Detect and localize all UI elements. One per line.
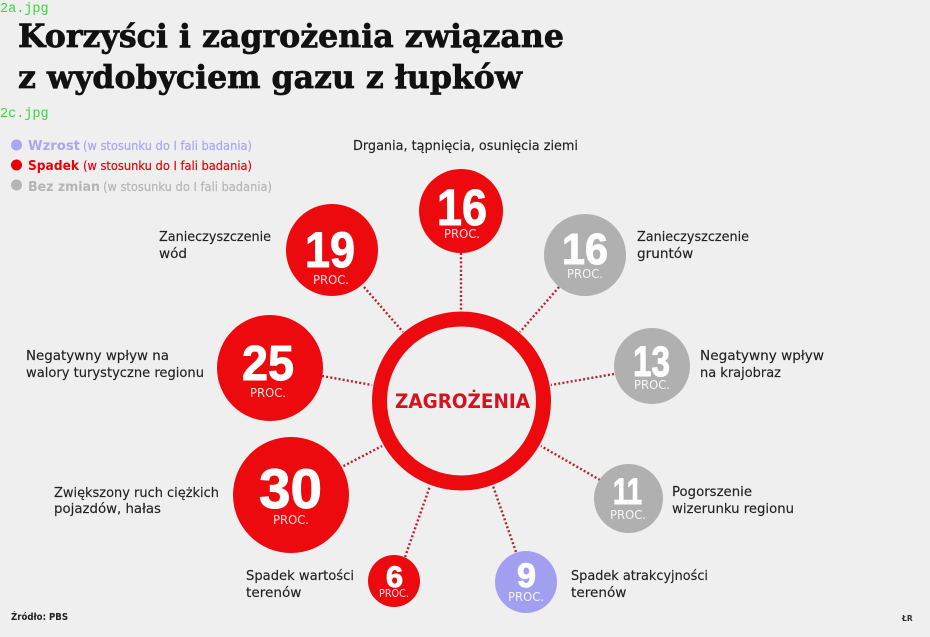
label: spadek atrakcyjności: terenów [571, 585, 626, 601]
bubble: 6 proc.: PROC. [379, 587, 409, 600]
bubble: 9 proc.: 9 [517, 557, 536, 595]
bubble: 16 proc. top: PROC. [444, 227, 480, 241]
bubble: 30 proc. [233, 437, 349, 553]
file tag: 2a.jpg: 2a.jpg [0, 2, 49, 17]
legend: Bez zmian [28, 179, 100, 195]
file tag: 2c.jpg: 2c.jpg [0, 107, 49, 122]
bubble: 16 proc. gray [544, 214, 626, 296]
bubble: 16 proc. gray: 16 [562, 225, 608, 274]
bubble: 16 proc. top [419, 169, 503, 253]
label: zanieczyszczenie gruntów [637, 229, 749, 262]
bubble: 19 proc.: PROC. [313, 273, 349, 287]
label: zanieczyszczenie gruntów: Zanieczyszczenie [637, 229, 749, 245]
central ring: zagrożenia: ZAGROŻENIA [395, 389, 530, 413]
bubble: 13 proc. [614, 328, 690, 404]
label: drgania: Drgania, tąpnięcia, osunięcia ziemi [353, 138, 578, 154]
label: zanieczyszczenie wód: wód [159, 246, 187, 262]
bubble: 25 proc.: 25 [242, 337, 294, 391]
legend: (w stosunku do I fali badania) [83, 159, 252, 173]
label: krajobraz [700, 348, 824, 381]
central ring: zagrożenia [380, 319, 544, 483]
label: wizerunek: wizerunku regionu [672, 501, 794, 517]
label: spadek atrakcyjności [571, 568, 708, 601]
label: zanieczyszczenie wód: Zanieczyszczenie [159, 229, 271, 245]
label: zanieczyszczenie gruntów: gruntów [637, 246, 693, 262]
label: zanieczyszczenie wód [159, 229, 271, 262]
label: krajobraz: na krajobraz [700, 365, 781, 381]
bubble: 9 proc. [495, 551, 557, 613]
author initials: ŁR [901, 614, 913, 623]
label: wizerunek: Pogorszenie [672, 484, 752, 500]
legend: (w stosunku do I fali badania) [83, 139, 252, 153]
label: spadek wartości [246, 568, 354, 601]
legend: Spadek [28, 158, 80, 174]
label: spadek wartości: Spadek wartości [246, 568, 354, 584]
legend: (w stosunku do I fali badania) [103, 180, 272, 194]
bubble: 25 proc. [217, 315, 323, 421]
legend: Wzrost [28, 138, 81, 154]
bubble: 13 proc.: 13 [633, 338, 670, 386]
bubble: 19 proc.: 19 [305, 222, 355, 278]
bubble: 19 proc. [286, 204, 378, 296]
label: walory turystyczne [26, 348, 204, 381]
title [18, 17, 564, 96]
label: spadek atrakcyjności: Spadek atrakcyjności [571, 568, 708, 584]
bubble: 16 proc. gray: PROC. [567, 267, 603, 281]
label: ruch pojazdów: pojazdów, hałas [54, 501, 161, 517]
bubble: 30 proc.: 30 [259, 457, 322, 520]
label: walory turystyczne: walory turystyczne regionu [26, 365, 204, 381]
label: krajobraz: Negatywny wpływ [700, 348, 824, 364]
source: Źródło: PBS [11, 611, 68, 623]
label: spadek wartości: terenów [246, 585, 301, 601]
label: walory turystyczne: Negatywny wpływ na [26, 348, 169, 364]
bubble: 11 proc.: PROC. [610, 508, 646, 522]
bubble: 25 proc.: PROC. [250, 386, 286, 400]
title: Korzyści i zagrożenia związane [18, 17, 564, 55]
bubble: 9 proc.: PROC. [508, 590, 544, 604]
bubble: 13 proc.: PROC. [634, 378, 670, 392]
legend [11, 138, 272, 195]
bubble: 30 proc.: PROC. [273, 513, 309, 527]
bubble: 11 proc. [594, 464, 663, 533]
bubble: 11 proc.: 11 [613, 471, 642, 512]
title: z wydobyciem gazu z łupków [18, 58, 523, 96]
bubble: 6 proc.: 6 [386, 561, 403, 594]
dotted connectors [322, 253, 614, 557]
bubble: 16 proc. top: 16 [437, 179, 487, 236]
label: ruch pojazdów [54, 485, 219, 517]
label: wizerunek [672, 484, 794, 517]
bubble: 6 proc. [368, 555, 420, 607]
label: ruch pojazdów: Zwiększony ruch ciężkich [54, 485, 219, 501]
